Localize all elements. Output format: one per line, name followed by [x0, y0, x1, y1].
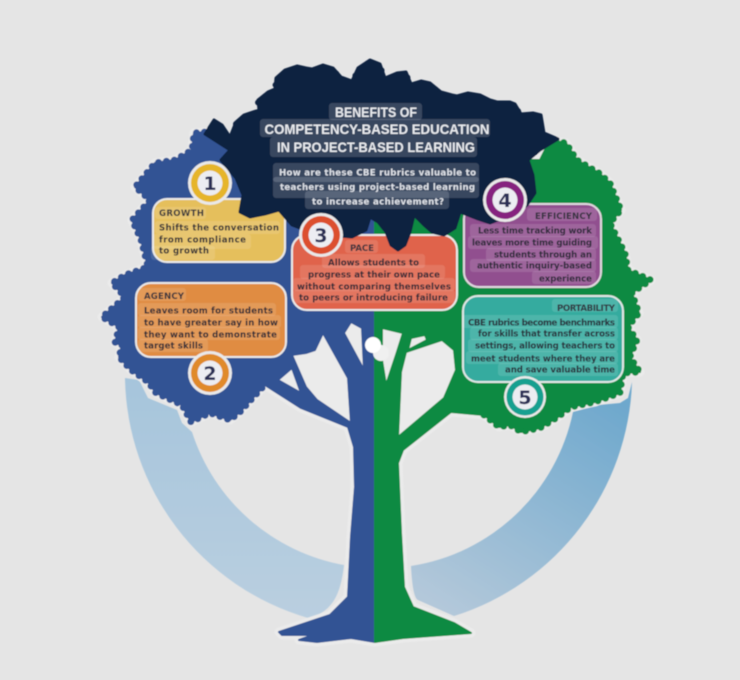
- text: pace description: [297, 258, 451, 304]
- text: guiding question: How are these CBE rubrics valuable to: [279, 168, 476, 178]
- text: pace description: Allows students to: [328, 258, 419, 268]
- text: guiding question: teachers using project-based learning: [280, 183, 475, 193]
- text: efficiency description: [472, 226, 592, 284]
- text: growth description: Shifts the conversation: [159, 224, 279, 234]
- text: portability description: for skills that transfer across: [478, 330, 615, 340]
- heading: efficiency: EFFICIENCY: [535, 212, 593, 222]
- panel: agency: [136, 283, 286, 357]
- text: portability description: meet students where they are: [471, 354, 615, 364]
- heading: portability: PORTABILITY: [557, 304, 616, 314]
- ring: right blue arc: [411, 382, 632, 616]
- panel: pace: [292, 235, 457, 310]
- badge 2: 2: [203, 363, 217, 385]
- text: pace description: progress at their own pace: [308, 270, 440, 280]
- text: agency description: to have greater say in how: [144, 318, 278, 328]
- text: growth description: from compliance: [159, 236, 246, 246]
- text: agency description: target skills: [144, 342, 203, 352]
- tree crown: dark navy: [205, 60, 558, 250]
- badge 5: [504, 376, 546, 418]
- text: growth description: to growth: [159, 246, 209, 256]
- title: COMPETENCY-BASED EDUCATION: [264, 121, 490, 137]
- title: [260, 103, 490, 157]
- text: growth description: [159, 224, 279, 256]
- text: pace description: to peers or introducing failure: [299, 294, 448, 304]
- title: IN PROJECT-BASED LEARNING: [277, 139, 475, 155]
- text: portability description: and save valuable time: [505, 366, 615, 376]
- text: guiding question: [273, 163, 479, 209]
- badge 4: 4: [498, 190, 512, 212]
- text: portability description: [468, 318, 615, 376]
- text: portability description: settings, allowing teachers to: [475, 342, 615, 352]
- text: efficiency description: Less time tracking work: [478, 226, 592, 236]
- text: agency description: Leaves room for students: [144, 306, 273, 316]
- text: efficiency description: authentic inquiry-based: [477, 262, 592, 272]
- badge 2: [188, 351, 232, 395]
- text: efficiency description: leaves more time guiding: [472, 238, 592, 248]
- panel: growth: [151, 199, 285, 262]
- text: agency description: [144, 306, 278, 352]
- heading: agency: AGENCY: [144, 292, 185, 302]
- ring: left pale blue arc: [125, 378, 344, 618]
- tree: blue left half: [102, 132, 375, 642]
- title: BENEFITS OF: [335, 104, 417, 120]
- panel: efficiency: [464, 204, 601, 287]
- text: efficiency description: experience: [539, 274, 592, 284]
- text: portability description: CBE rubrics become benchmarks: [468, 318, 615, 328]
- panel: portability: [462, 296, 623, 382]
- text: efficiency description: students through an: [494, 250, 592, 260]
- tree halo: [102, 132, 651, 642]
- badge 5: 5: [518, 387, 532, 409]
- heading: growth: GROWTH: [159, 209, 204, 219]
- badge 3: 3: [314, 225, 328, 247]
- badge 4: [483, 178, 527, 222]
- text: guiding question: to increase achievement?: [312, 198, 444, 208]
- badge 1: 1: [203, 173, 217, 195]
- badge 3: [299, 213, 343, 257]
- heading: pace: PACE: [350, 244, 374, 254]
- white dots at trunk centre: [365, 337, 389, 361]
- tree: green right half: [375, 140, 651, 642]
- text: pace description: without comparing themselves: [297, 282, 451, 292]
- badge 1: [188, 161, 232, 205]
- text: agency description: they want to demonstrate: [144, 330, 277, 340]
